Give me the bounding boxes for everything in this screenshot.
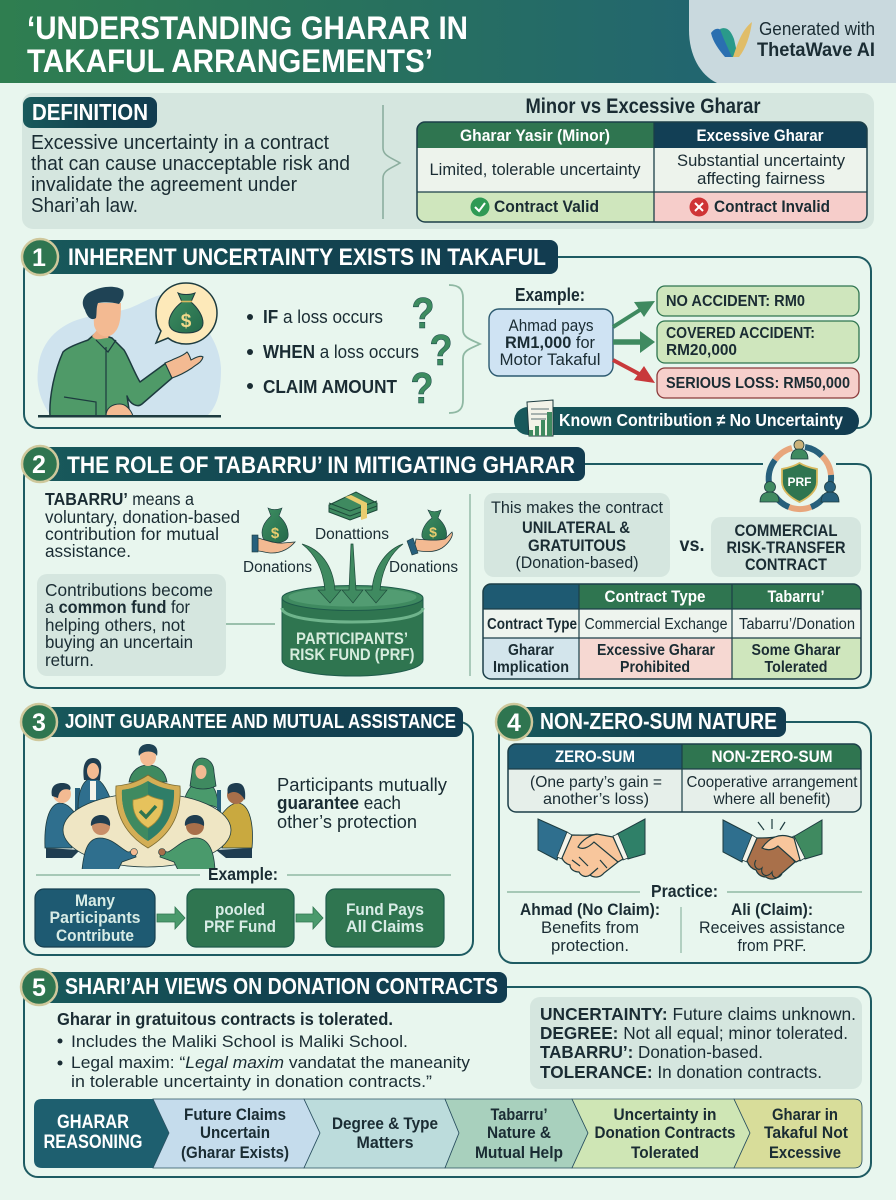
flow: many participants contribute: Participants — [50, 908, 140, 927]
step: uncertainty tolerated: Tolerated — [631, 1144, 699, 1162]
labels: donations: Donations — [389, 559, 458, 576]
heading 2: THE ROLE OF TABARRU’ IN MITIGATING GHARAR — [67, 452, 575, 479]
icon: question marks: ? — [430, 326, 452, 375]
comparison table: contract type vs tabarru: Tabarru’/Donation — [739, 616, 855, 633]
comparison table: contract type vs tabarru: Gharar — [508, 642, 554, 659]
icon: document with chart — [527, 400, 553, 436]
labels: donations — [243, 526, 458, 576]
header banner — [0, 0, 896, 83]
step: tabarru nature: Tabarru’ — [490, 1106, 548, 1124]
comparison table — [417, 122, 867, 222]
logo badge: ThetaWave AI: ThetaWave AI — [757, 40, 875, 61]
panel: definition and minor vs excessive — [22, 93, 874, 229]
box: unilateral and gratuitous — [484, 493, 670, 577]
step: uncertainty tolerated: Uncertainty in — [614, 1106, 716, 1124]
comparison table: contract type vs tabarru: Contract Type — [487, 616, 577, 633]
comparison table: contract type vs tabarru: Tolerated — [764, 659, 828, 676]
icon: right hand with bag — [407, 510, 452, 555]
example label: Example: — [515, 285, 585, 305]
outcome: covered accident: RM20,000 — [666, 342, 737, 359]
arrows: outcomes — [613, 301, 655, 383]
practice: Ahmad: Benefits from — [541, 918, 639, 937]
step: tabarru nature: Nature & — [487, 1124, 551, 1142]
box: unilateral and gratuitous: (Donation-based) — [516, 553, 638, 572]
outcome: covered accident: COVERED ACCIDENT: — [666, 325, 815, 342]
heading 3: 3 — [32, 709, 46, 737]
step: future claims: Uncertain — [200, 1124, 270, 1142]
icon: left hand with bag: $ — [271, 525, 280, 542]
practice: Ahmad: protection. — [551, 936, 629, 955]
icon: cash stack — [329, 492, 377, 520]
definition badge: DEFINITION — [32, 99, 148, 125]
flow: many participants contribute — [35, 889, 155, 947]
icon: right hand with bag: $ — [429, 524, 437, 540]
icon: question marks: ? — [410, 364, 434, 413]
box: commercial risk-transfer: COMMERCIAL — [734, 521, 838, 540]
heading 4 — [496, 704, 786, 740]
step: uncertainty tolerated: Donation Contracts — [594, 1124, 736, 1142]
definition text: Excessive uncertainty in a contract — [31, 132, 329, 154]
heading 3 — [21, 704, 463, 740]
practice: Ali: Ali (Claim): — [731, 900, 813, 919]
practice: Ahmad: Ahmad (No Claim): — [520, 900, 660, 919]
step: future claims — [153, 1099, 320, 1168]
table: zero-sum vs non-zero-sum: another’s loss) — [543, 791, 649, 808]
example box: Ahmad pays: Motor Takaful — [500, 350, 600, 369]
text: mutual guarantee: Participants mutually — [277, 775, 447, 795]
text: tabarru meaning: assistance. — [45, 541, 131, 561]
outcome: covered accident — [657, 321, 859, 363]
icon: handshake, mixed hands — [723, 819, 822, 879]
comparison table: contract type vs tabarru: Tabarru’ — [768, 587, 824, 606]
list: uncertain factors — [247, 289, 452, 413]
icon: wave W logo — [711, 22, 752, 57]
step: degree and type: Degree & Type — [332, 1115, 438, 1133]
heading 2: 2 — [32, 451, 46, 479]
text: tabarru meaning: voluntary, donation-based — [45, 507, 240, 527]
flow: pooled PRF fund: PRF Fund — [204, 917, 276, 936]
step: tabarru nature: Mutual Help — [475, 1144, 563, 1162]
list: uncertain factors: CLAIM AMOUNT — [263, 377, 397, 397]
practice: Ali: from PRF. — [738, 936, 806, 955]
step: future claims: (Gharar Exists) — [181, 1144, 289, 1162]
drum: participants risk fund — [282, 586, 423, 676]
person: woman in hijab — [183, 758, 221, 812]
labels: donations: Donattions — [315, 526, 389, 543]
box: unilateral and gratuitous: GRATUITOUS — [528, 536, 626, 555]
list: uncertain factors: WHEN a loss occurs — [263, 342, 419, 362]
table: zero-sum vs non-zero-sum: NON-ZERO-SUM — [712, 748, 832, 766]
person: man left — [44, 783, 78, 858]
box: commercial risk-transfer: CONTRACT — [745, 555, 828, 574]
person: man right — [217, 783, 253, 858]
logo badge: ThetaWave AI — [689, 0, 896, 83]
text: gratuitous contracts: in tolerable uncertainty in donation contracts.” — [71, 1072, 432, 1091]
comparison table: affecting fairness — [697, 169, 825, 188]
heading 1 — [22, 239, 558, 275]
practice: Ahmad — [520, 900, 660, 955]
comparison table: Gharar Yasir (Minor) — [460, 126, 610, 145]
comparison table: contract type vs tabarru: Excessive Gharar — [597, 642, 715, 659]
comparison table: Limited, tolerable uncertainty — [430, 160, 641, 179]
logo badge: ThetaWave AI: Generated with — [759, 19, 875, 39]
text: gratuitous contracts: Legal maxim: “Legal maxim vandatat the maneanity — [71, 1053, 470, 1072]
callout: common fund: buying an uncertain — [45, 632, 193, 652]
arrows: flows into fund — [302, 544, 403, 603]
box: key points — [530, 997, 862, 1089]
step: not excessive: Takaful Not — [764, 1124, 848, 1142]
box: key points: TOLERANCE: In donation contracts. — [540, 1062, 822, 1082]
comparison table: contract type vs tabarru — [483, 584, 861, 679]
flow: fund pays all claims — [326, 889, 444, 947]
heading 4: NON-ZERO-SUM NATURE — [540, 708, 777, 734]
definition text — [31, 132, 350, 217]
callout: known contribution — [514, 400, 859, 436]
panel 4: non-zero-sum nature — [496, 704, 871, 963]
example box: Ahmad pays: RM1,000 for — [505, 333, 595, 352]
step: not excessive — [734, 1099, 862, 1168]
callout: common fund: return. — [45, 650, 94, 670]
text: gratuitous contracts — [57, 1009, 470, 1091]
outcome: no accident — [657, 286, 859, 316]
icon: speech bubble money bag — [156, 283, 217, 344]
text: mutual guarantee: other’s protection — [277, 812, 417, 832]
person: front left — [82, 815, 138, 870]
icon: question marks: ? — [412, 289, 434, 338]
step: gharar reasoning — [34, 1099, 169, 1168]
panel 2: role of tabarru — [22, 440, 871, 688]
text: gratuitous contracts: Gharar in gratuitous contracts is tolerated. — [57, 1009, 393, 1029]
step: uncertainty tolerated — [572, 1099, 750, 1168]
step: degree and type — [304, 1099, 459, 1168]
flow: pooled PRF fund: pooled — [215, 900, 265, 919]
heading 3: JOINT GUARANTEE AND MUTUAL ASSISTANCE — [65, 711, 456, 733]
comparison table: Contract Invalid — [714, 197, 830, 216]
flow: many participants contribute: Many — [75, 891, 115, 910]
step: not excessive: Gharar in — [772, 1106, 838, 1124]
callout: common fund: helping others, not — [45, 615, 185, 635]
example box: Ahmad pays — [489, 309, 613, 376]
table: zero-sum vs non-zero-sum — [508, 744, 861, 812]
table: zero-sum vs non-zero-sum: ZERO-SUM — [555, 748, 635, 766]
icon: left hand with bag — [252, 508, 295, 553]
text: tabarru meaning: contribution for mutual — [45, 524, 219, 544]
heading 5: SHARI’AH VIEWS ON DONATION CONTRACTS — [65, 973, 498, 999]
example box: Ahmad pays: Ahmad pays — [508, 316, 594, 335]
heading 4: 4 — [507, 709, 521, 737]
outcome: no accident: NO ACCIDENT: RM0 — [666, 293, 805, 310]
icon: handshake, light hands — [538, 819, 645, 877]
heading 5 — [21, 969, 507, 1005]
icon: PRF ring of people: PRF — [788, 475, 812, 489]
practice: Ali — [699, 900, 845, 955]
illustration: people around table with shield — [45, 744, 252, 870]
comparison heading: Minor vs Excessive Gharar — [526, 95, 760, 118]
comparison table: contract type vs tabarru: Commercial Exchange — [584, 616, 728, 633]
icon: speech bubble money bag: $ — [181, 311, 192, 332]
box: key points: UNCERTAINTY: Future claims unknown. — [540, 1004, 856, 1024]
definition text: that can cause unacceptable risk and — [31, 153, 350, 175]
comparison table: Contract Valid — [494, 197, 599, 216]
drum: participants risk fund: RISK FUND (PRF) — [290, 645, 414, 664]
title — [27, 10, 468, 79]
flow: fund pays all claims: All Claims — [346, 917, 424, 936]
callout: known contribution: Known Contribution ≠ No Uncertainty — [559, 410, 843, 430]
icon: check — [470, 198, 490, 216]
labels: donations: Donations — [243, 559, 312, 576]
box: commercial risk-transfer — [711, 517, 861, 577]
step: gharar reasoning: REASONING — [44, 1132, 142, 1153]
box: unilateral and gratuitous: UNILATERAL & — [522, 518, 630, 537]
comparison table: contract type vs tabarru: Prohibited — [620, 659, 690, 676]
box: commercial risk-transfer: RISK-TRANSFER — [726, 538, 846, 557]
heading 2 — [22, 446, 585, 482]
outcome: serious loss: SERIOUS LOSS: RM50,000 — [666, 375, 850, 392]
table top — [63, 793, 231, 867]
flow: many participants contribute: Contribute — [56, 926, 134, 945]
heading 1: INHERENT UNCERTAINTY EXISTS IN TAKAFUL — [68, 244, 546, 271]
step: gharar reasoning: GHARAR — [57, 1112, 129, 1133]
title: TAKAFUL ARRANGEMENTS’ — [27, 43, 433, 79]
flow: fund pays all claims: Fund Pays — [346, 900, 424, 919]
step: not excessive: Excessive — [769, 1144, 841, 1162]
chevron flow: gharar reasoning — [34, 1099, 862, 1168]
comparison table: Excessive Gharar — [696, 126, 824, 145]
comparison table: contract type vs tabarru: Contract Type — [604, 587, 706, 606]
comparison table: Substantial uncertainty — [677, 151, 845, 170]
step: degree and type: Matters — [356, 1134, 414, 1152]
text: tabarru meaning — [45, 489, 240, 561]
person: woman left — [75, 758, 112, 812]
definition text: Shari’ah law. — [31, 195, 138, 217]
icon: PRF ring of people — [760, 440, 839, 509]
heading 1: 1 — [32, 244, 46, 272]
practice: Ali: Receives assistance — [699, 918, 845, 937]
person: front right — [158, 815, 215, 870]
text: mutual guarantee — [277, 775, 447, 832]
table: zero-sum vs non-zero-sum: (One party’s gain = — [530, 774, 662, 791]
callout: common fund: Contributions become — [45, 580, 213, 600]
callout: common fund — [37, 574, 226, 676]
heading 5: 5 — [32, 974, 46, 1002]
list: uncertain factors: IF a loss occurs — [263, 307, 383, 327]
table: zero-sum vs non-zero-sum: where all benefit) — [713, 791, 830, 808]
practice divider: Practice: — [651, 881, 718, 901]
title: ‘UNDERSTANDING GHARAR IN — [27, 10, 468, 46]
shield — [116, 775, 180, 848]
panel 5: shariah views — [21, 969, 871, 1177]
panel 3: joint guarantee — [21, 704, 473, 955]
step: tabarru nature — [445, 1099, 588, 1168]
outcome: serious loss — [657, 368, 859, 398]
illustration: person with speech bubble — [38, 283, 221, 418]
callout: common fund: a common fund for — [45, 597, 190, 617]
box: key points: DEGREE: Not all equal; minor tolerated. — [540, 1023, 848, 1043]
person: top — [129, 744, 167, 782]
flow: pooled PRF fund — [187, 889, 294, 947]
arrow — [296, 907, 323, 929]
comparison table: contract type vs tabarru: Implication — [493, 659, 569, 676]
step: future claims: Future Claims — [184, 1106, 286, 1124]
box: unilateral and gratuitous: This makes the contract — [491, 498, 663, 517]
arrow — [157, 907, 185, 929]
drum: participants risk fund: PARTICIPANTS’ — [296, 629, 408, 648]
text: gratuitous contracts: Includes the Maliki School is Maliki School. — [71, 1032, 408, 1051]
comparison table: contract type vs tabarru: Some Gharar — [752, 642, 840, 659]
text: tabarru meaning: TABARRU’ means a — [45, 489, 194, 509]
example divider: Example: — [208, 864, 278, 884]
panel 1: inherent uncertainty — [22, 239, 871, 436]
definition text: invalidate the agreement under — [31, 174, 297, 196]
box: key points: TABARRU’: Donation-based. — [540, 1042, 763, 1062]
icon: cross — [690, 198, 708, 216]
text: mutual guarantee: guarantee each — [277, 793, 401, 813]
vs label: vs. — [680, 535, 704, 556]
table: zero-sum vs non-zero-sum: Cooperative arrangement — [686, 774, 858, 791]
icon: question marks — [410, 289, 452, 413]
